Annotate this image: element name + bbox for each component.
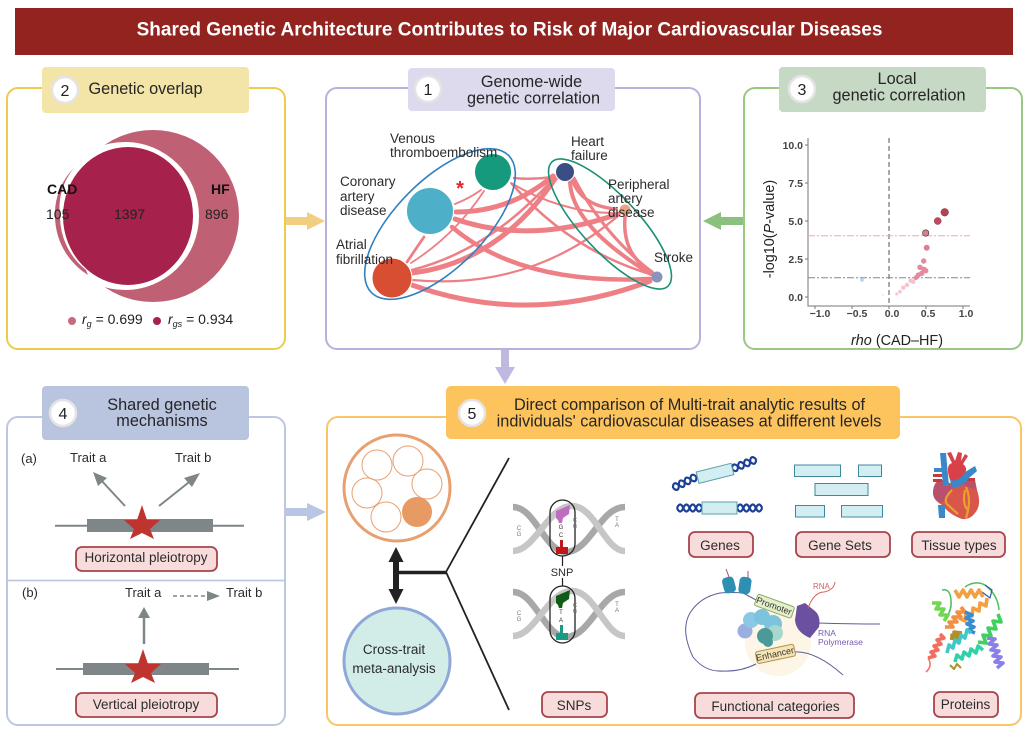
SNP illustration: C bbox=[573, 518, 578, 524]
heading: genetic overlap: Genetic overlap bbox=[88, 80, 203, 98]
arrow: local correlation to genome-wide bbox=[703, 212, 744, 230]
venn diagram bbox=[46, 130, 239, 302]
panel 5: multi-trait comparison bbox=[327, 386, 1021, 725]
genes icon bbox=[671, 456, 762, 514]
functional categories illustration: Polymerase bbox=[818, 637, 863, 647]
bracket lines bbox=[398, 571, 446, 574]
scatter plot: 0.0 bbox=[885, 308, 899, 320]
SNP illustration: G bbox=[573, 609, 578, 615]
horizontal pleiotropy diagram: (a) bbox=[21, 451, 37, 466]
heading: mechanisms: mechanisms bbox=[116, 412, 208, 430]
SNP illustration: C bbox=[559, 533, 564, 539]
scatter plot bbox=[762, 138, 973, 349]
SNP illustration: G bbox=[517, 532, 522, 538]
legend: r bbox=[82, 311, 88, 327]
label: SNPs bbox=[542, 692, 607, 717]
SNP illustration: G bbox=[573, 524, 578, 530]
vertical pleiotropy diagram: (b) bbox=[22, 585, 38, 600]
label: genes: Genes bbox=[700, 538, 740, 553]
scatter plot: -log10(P-value) bbox=[762, 180, 778, 278]
venn diagram: 105 bbox=[46, 206, 70, 222]
label: gene sets bbox=[796, 532, 890, 557]
heading: local correlation: 3 bbox=[798, 82, 807, 99]
node: atrial fibrillation bbox=[372, 258, 412, 298]
protein illustration bbox=[926, 583, 1003, 672]
vertical pleiotropy diagram bbox=[22, 585, 262, 683]
heading: genome-wide: genetic correlation bbox=[467, 90, 600, 108]
heading: direct comparison bbox=[446, 386, 900, 439]
panel 1: genome-wide genetic correlation bbox=[326, 68, 700, 349]
arrow: overlap to correlation bbox=[285, 212, 325, 230]
node labels: Heart bbox=[571, 134, 604, 149]
heading: mechanisms: Shared genetic bbox=[107, 396, 217, 414]
heading: genome-wide: 1 bbox=[424, 82, 433, 99]
vertical pleiotropy diagram: Trait a bbox=[125, 585, 162, 600]
SNP illustration: SNP bbox=[551, 567, 573, 579]
label: vertical pleiotropy: Vertical pleiotropy bbox=[93, 697, 200, 712]
legend: g bbox=[87, 319, 92, 329]
node: venous thromboembolism bbox=[474, 154, 512, 190]
label: SNPs: SNPs bbox=[557, 698, 592, 713]
SNP illustration: C bbox=[517, 526, 522, 532]
heading: direct comparison: individuals' cardiovascular diseases at different levels bbox=[497, 412, 881, 430]
panel 2: genetic overlap bbox=[7, 67, 285, 349]
significance star: * bbox=[456, 178, 464, 200]
SNP illustration: G bbox=[517, 617, 522, 623]
label: gene sets: Gene Sets bbox=[808, 538, 872, 553]
SNP illustration: T bbox=[615, 602, 619, 608]
label: horizontal pleiotropy bbox=[76, 547, 217, 571]
node labels bbox=[336, 131, 693, 267]
node labels: Stroke bbox=[654, 250, 693, 265]
trait cluster circle bbox=[344, 435, 450, 541]
heading: direct comparison: 5 bbox=[468, 406, 477, 423]
title banner bbox=[15, 8, 1013, 55]
label: vertical pleiotropy bbox=[76, 693, 217, 717]
label: functional categories bbox=[695, 693, 854, 718]
scatter plot: rho (CAD–HF) bbox=[851, 333, 943, 349]
node labels: Peripheral bbox=[608, 177, 670, 192]
SNP illustration: C bbox=[573, 603, 578, 609]
heading: genome-wide bbox=[408, 68, 615, 111]
scatter plot: −1.0 bbox=[810, 308, 831, 320]
cross-trait meta-analysis circle: Cross-trait bbox=[363, 642, 425, 657]
functional categories illustration: RNA bbox=[818, 628, 836, 638]
double arrow bbox=[388, 547, 404, 604]
SNP illustration: T bbox=[615, 517, 619, 523]
label: genes bbox=[689, 532, 753, 557]
SNP illustration: A bbox=[559, 618, 563, 624]
SNP illustration: T bbox=[559, 610, 563, 616]
functional categories illustration: Enhancer bbox=[755, 645, 795, 663]
node labels: failure bbox=[571, 148, 608, 163]
node labels: thromboembolism bbox=[390, 145, 497, 160]
label: proteins: Proteins bbox=[941, 697, 991, 712]
venn diagram: 896 bbox=[205, 206, 229, 222]
node labels: artery bbox=[340, 189, 375, 204]
heading: genetic overlap bbox=[42, 67, 249, 113]
arrow: genome-wide to multi-trait bbox=[495, 350, 515, 384]
gene sets icon bbox=[794, 465, 882, 517]
panel 3: local genetic correlation bbox=[744, 67, 1022, 349]
panel 4: shared genetic mechanisms bbox=[7, 386, 285, 725]
heading: genome-wide: Genome-wide bbox=[481, 73, 582, 91]
venn diagram: HF bbox=[211, 181, 230, 197]
functional categories illustration: RNA bbox=[813, 582, 831, 591]
venn diagram: 1397 bbox=[114, 206, 145, 222]
node: peripheral artery disease bbox=[620, 204, 630, 216]
scatter plot: 1.0 bbox=[959, 308, 973, 320]
vertical pleiotropy diagram: Trait b bbox=[226, 585, 262, 600]
node labels: artery bbox=[608, 191, 643, 206]
scatter plot: 5.0 bbox=[788, 216, 803, 228]
heart icon bbox=[933, 452, 979, 519]
legend bbox=[68, 311, 233, 329]
scatter plot: 0.5 bbox=[921, 308, 935, 320]
node labels: Venous bbox=[390, 131, 435, 146]
scatter plot: 2.5 bbox=[788, 254, 803, 266]
venn diagram: CAD bbox=[47, 181, 77, 197]
node: stroke bbox=[652, 272, 662, 282]
scatter plot: 0.0 bbox=[788, 292, 803, 304]
node labels: Atrial bbox=[336, 237, 367, 252]
horizontal pleiotropy diagram bbox=[21, 450, 244, 539]
legend: gs bbox=[173, 319, 183, 329]
heading: local correlation bbox=[779, 67, 986, 112]
horizontal pleiotropy diagram: Trait a bbox=[70, 450, 107, 465]
title banner: Shared Genetic Architecture Contributes to Risk of Major Cardiovascular Diseases bbox=[137, 20, 882, 40]
node: heart failure bbox=[556, 162, 574, 182]
heading: genetic overlap: 2 bbox=[61, 83, 70, 100]
legend: = 0.699 bbox=[92, 311, 143, 327]
SNP illustration: A bbox=[615, 523, 619, 529]
network edges bbox=[407, 176, 652, 305]
heading: direct comparison: Direct comparison of Multi-trait analytic results of bbox=[514, 396, 866, 414]
scatter plot: 10.0 bbox=[783, 140, 803, 152]
cross-trait meta-analysis circle bbox=[344, 608, 450, 714]
heading: mechanisms bbox=[42, 386, 249, 440]
functional categories illustration: Promoter bbox=[755, 595, 793, 617]
heading: local correlation: Local bbox=[878, 70, 916, 88]
label: functional categories: Functional categories bbox=[711, 699, 840, 714]
node labels: Coronary bbox=[340, 174, 396, 189]
SNP illustration: G bbox=[559, 525, 564, 531]
node: coronary artery disease bbox=[406, 188, 454, 234]
scatter plot: 7.5 bbox=[788, 178, 803, 190]
label: proteins bbox=[934, 692, 998, 717]
heading: mechanisms: 4 bbox=[59, 406, 68, 423]
label: horizontal pleiotropy: Horizontal pleiotropy bbox=[84, 550, 208, 565]
ellipse: green cluster bbox=[532, 143, 688, 305]
SNP illustration: A bbox=[615, 608, 619, 614]
legend: = 0.934 bbox=[182, 311, 233, 327]
label: tissue types bbox=[912, 532, 1005, 557]
horizontal pleiotropy diagram: Trait b bbox=[175, 450, 211, 465]
heading: local correlation: genetic correlation bbox=[832, 86, 966, 104]
scatter plot: −0.5 bbox=[847, 308, 868, 320]
legend: r bbox=[168, 311, 174, 327]
node labels: disease bbox=[340, 203, 387, 218]
node labels: disease bbox=[608, 205, 655, 220]
label: tissue types: Tissue types bbox=[921, 538, 997, 553]
arrow: mechanisms to multi-trait bbox=[286, 503, 326, 521]
functional categories illustration bbox=[686, 569, 880, 676]
SNP illustration bbox=[513, 500, 625, 643]
cross-trait meta-analysis circle: meta-analysis bbox=[352, 661, 436, 676]
SNP illustration: C bbox=[517, 611, 522, 617]
node labels: fibrillation bbox=[336, 252, 393, 267]
ellipse: blue cluster bbox=[340, 124, 540, 324]
bracket fan bbox=[446, 458, 509, 710]
